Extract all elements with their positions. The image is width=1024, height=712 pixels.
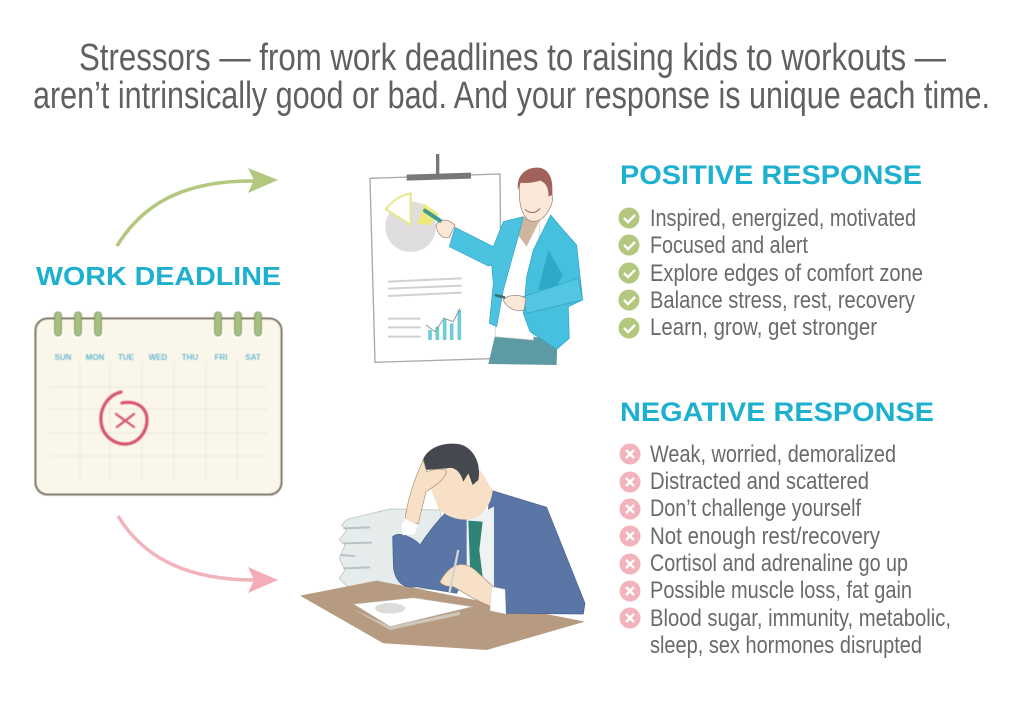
item: not enough rest: Not enough rest/recovery (650, 523, 880, 550)
arrow: up to positive response (117, 168, 278, 246)
chart board (370, 154, 502, 362)
deadline mark (101, 392, 147, 444)
arrow: down to negative response (118, 516, 278, 593)
item: cortisol: Cortisol and adrenaline go up (650, 550, 908, 577)
item: distracted: Distracted and scattered (650, 468, 869, 495)
item: blood sugar: Blood sugar, immunity, metabolic, (650, 605, 951, 632)
item: inspired: Inspired, energized, motivated (650, 205, 916, 232)
weekday labels: SAT (245, 353, 261, 362)
papers on desk (352, 598, 473, 630)
item: learn: Learn, grow, get stronger (650, 314, 877, 341)
paper stack (339, 509, 450, 590)
item: balance: Balance stress, rest, recovery (650, 287, 915, 314)
item: blood sugar (620, 605, 951, 659)
presenter (425, 168, 583, 365)
weekday labels: MON (86, 353, 105, 362)
list: negative response (620, 441, 951, 659)
weekday labels: WED (149, 353, 168, 362)
title (33, 37, 990, 117)
desk (300, 581, 585, 650)
item: muscle loss: Possible muscle loss, fat gain (650, 577, 912, 604)
illustration: stressed man at desk (300, 444, 585, 650)
item: explore: Explore edges of comfort zone (650, 260, 923, 287)
item: focused: Focused and alert (650, 232, 808, 259)
heading: work deadline: WORK DEADLINE (36, 261, 281, 291)
item: no challenge: Don’t challenge yourself (650, 495, 861, 522)
heading: positive response: POSITIVE RESPONSE (620, 160, 922, 190)
item: weak: Weak, worried, demoralized (650, 441, 896, 468)
list: positive response (618, 205, 923, 341)
item: blood sugar: sleep, sex hormones disrupted (650, 632, 922, 659)
weekday labels: FRI (215, 353, 227, 362)
weekday labels (55, 353, 261, 362)
weekday labels: TUE (118, 353, 135, 362)
illustration: presenter at chart board (370, 154, 583, 365)
weekday labels: THU (182, 353, 198, 362)
man (393, 444, 585, 614)
icon: calendar (36, 312, 282, 494)
heading: negative response: NEGATIVE RESPONSE (620, 397, 934, 427)
weekday labels: SUN (55, 353, 72, 362)
